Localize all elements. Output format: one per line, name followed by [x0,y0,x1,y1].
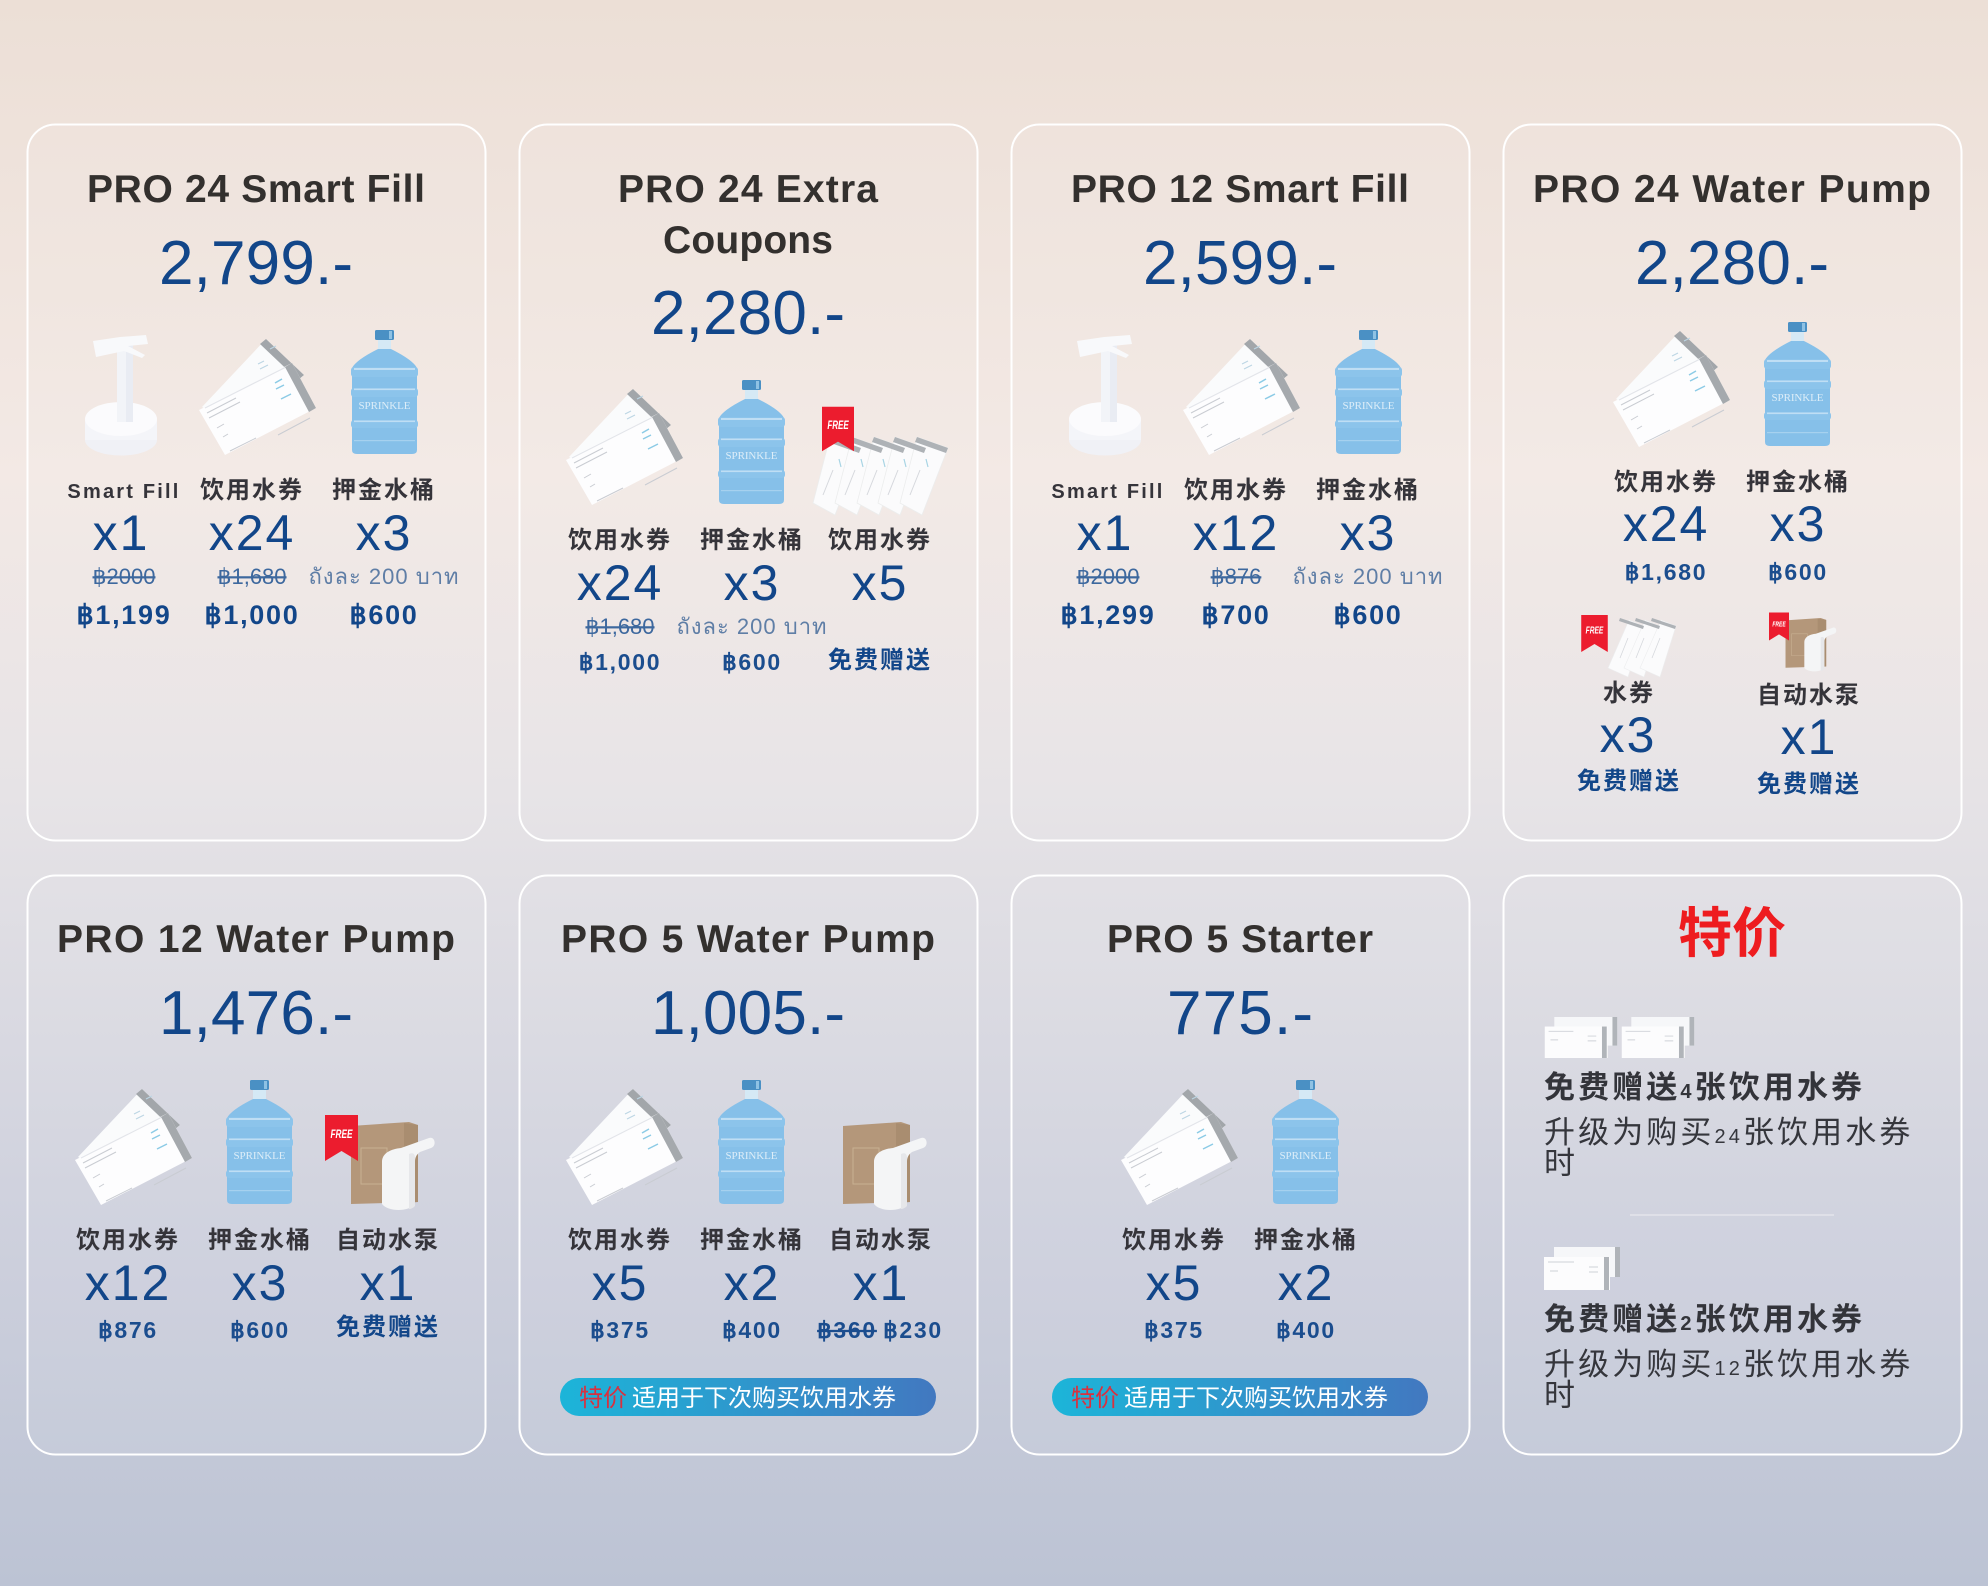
item: free pump: 免费赠送 [1757,771,1861,798]
price: 2,280.- [1635,229,1829,298]
item: coupons [1184,477,1288,630]
item: deposit bottle: x3 [1340,505,1396,561]
item: deposit bottle: ฿400 [1276,1317,1336,1343]
item: deposit bottle: x3 [356,505,412,561]
item: free coupons [828,527,932,674]
heading line 2: Coupons [663,219,833,262]
item: deposit bottle: ฿600 [722,649,782,675]
item: smart fill: ฿2000 [93,564,155,589]
panel: PRO 24 Extra Coupons [520,124,978,840]
icon: bottle [718,1080,785,1204]
item: deposit bottle: x2 [724,1255,780,1311]
item: coupons: x12 [1193,505,1279,561]
offer text: 4 free coupons: 免费赠送4张饮用水券 [1544,1070,1865,1105]
item: coupons: ฿375 [590,1317,650,1343]
item: deposit bottle [208,1226,312,1343]
item: deposit bottle: ถังละ 200 บาท [308,564,460,589]
item: smart fill [1051,481,1165,630]
icon: coupon [1121,1089,1238,1205]
heading: PRO 12 Smart Fill [1071,168,1409,211]
price: 1,005.- [651,979,845,1048]
callout pill [1052,1378,1428,1416]
icon: pump box [1786,618,1836,671]
panel: PRO 5 Starter [1012,876,1470,1454]
item: deposit bottle [1292,476,1444,630]
offer text: 2 free coupons: 升级为购买12张饮用水券 [1544,1347,1913,1382]
item: free pump: x1 [1781,709,1837,765]
panel: PRO 12 Smart Fill [1012,124,1470,840]
icon: free coupons [1608,618,1676,677]
item: deposit bottle: ฿600 [230,1317,290,1343]
item: coupons: x24 [1623,496,1709,552]
icon: bottle [1764,322,1831,446]
callout pill: 适用于下次购买饮用水券 [632,1385,896,1412]
item: coupons: x24 [577,555,663,611]
item: coupons: x5 [592,1255,648,1311]
price: 2,799.- [159,229,353,298]
panel: PRO 24 Water Pump [1504,124,1962,840]
item: coupons: 饮用水券 [76,1227,180,1254]
item: deposit bottle: 押金水桶 [1746,468,1850,496]
item: pump: x1 [853,1255,909,1311]
item: smart fill: ฿1,199 [77,600,171,630]
icon: flat coupons [1545,1017,1617,1058]
price: 775.- [1167,979,1313,1048]
item: free coupons: 免费赠送 [1577,768,1681,795]
icon: coupon [566,1089,683,1205]
item: coupons: 饮用水券 [568,1227,672,1254]
callout pill: 特价 [1071,1385,1119,1412]
item: deposit bottle: 押金水桶 [700,526,804,554]
item: deposit bottle [308,476,460,630]
item: smart fill [67,481,181,630]
item: coupons: 饮用水券 [1184,477,1288,504]
icon: free ribbon [822,407,854,451]
icon: coupon [75,1089,192,1205]
icon: pump box [351,1122,435,1210]
panel: PRO 5 Water Pump [520,876,978,1454]
callout pill: 适用于下次购买饮用水券 [1124,1385,1388,1412]
item: deposit bottle: ฿600 [1768,559,1828,585]
item: deposit bottle: x3 [1770,496,1826,552]
item: coupons: x24 [209,505,295,561]
item: deposit bottle: 押金水桶 [700,1226,804,1254]
item: free coupons: 免费赠送 [828,647,932,674]
item: free pump: 自动水泵 [336,1227,440,1254]
item: coupons: 饮用水券 [1122,1227,1226,1254]
item: deposit bottle: 押金水桶 [332,476,436,504]
item: deposit bottle: ถังละ 200 บาท [676,614,828,639]
icon: coupon [1613,331,1730,447]
item: deposit bottle: ฿400 [722,1317,782,1343]
item: coupons: ฿1,680 [1625,559,1707,585]
offer text: 2 free coupons: 时 [1544,1378,1578,1413]
item: free pump: 免费赠送 [336,1314,440,1341]
panel: special offer [1504,876,1962,1454]
heading: special price: 特价 [1678,904,1786,964]
icon: flat coupons [1622,1017,1694,1058]
item: pump: ฿360 [817,1317,877,1343]
icon: smart fill [85,335,157,456]
item: coupons [568,527,672,675]
item: deposit bottle: x3 [232,1255,288,1311]
icon: coupon [1183,339,1300,455]
item: deposit bottle: ฿600 [1333,600,1403,630]
item: coupons: 饮用水券 [1614,469,1718,496]
item: deposit bottle: x2 [1278,1255,1334,1311]
item: pump: ฿230 [883,1317,943,1343]
item: smart fill: Smart Fill [1051,481,1165,503]
icon: bottle [1272,1080,1339,1204]
item: coupons [568,1227,672,1343]
callout pill [560,1378,936,1416]
item: free coupons: x3 [1600,707,1656,763]
item: free coupons [1577,680,1681,795]
icon: free ribbon [325,1115,358,1161]
item: smart fill: ฿2000 [1077,564,1139,589]
icon: bottle [226,1080,293,1204]
item: deposit bottle: x3 [724,555,780,611]
icon: free ribbon [1581,615,1608,652]
item: smart fill: x1 [1077,505,1133,561]
panel: PRO 12 Water Pump [28,876,486,1454]
heading: PRO 24 Water Pump [1533,168,1931,211]
icon: smart fill [1069,335,1141,456]
callout pill: 特价 [579,1385,627,1412]
offer text: 4 free coupons: 升级为购买24张饮用水券 [1544,1115,1913,1150]
item: smart fill: x1 [93,505,149,561]
icon: bottle [351,330,418,454]
item: coupons: ฿1,680 [217,564,287,589]
offer text: 4 free coupons: 时 [1544,1146,1578,1181]
item: free coupons: 水券 [1603,680,1655,707]
item: coupons: ฿876 [1211,564,1261,589]
icon: coupon [199,339,316,455]
item: free pump [1757,682,1861,798]
item: coupons: 饮用水券 [200,477,304,504]
heading: PRO 5 Water Pump [561,918,935,961]
icon: free coupons [813,437,948,515]
icon: pump box [843,1122,927,1210]
item: coupons: ฿1,680 [585,614,655,639]
item: coupons [200,477,304,630]
item: coupons [76,1227,180,1343]
item: deposit bottle [676,526,828,675]
item: deposit bottle: 押金水桶 [1254,1226,1358,1254]
panel: PRO 24 Smart Fill [28,124,486,840]
offer text: 4 free coupons [1544,1070,1913,1181]
icon: bottle [718,380,785,504]
item: smart fill: ฿1,299 [1061,600,1155,630]
item: deposit bottle [700,1226,804,1343]
price: 2,280.- [651,279,845,348]
item: coupons [1122,1227,1226,1343]
item: coupons: x5 [1146,1255,1202,1311]
item: deposit bottle: ฿600 [349,600,419,630]
price: 2,599.- [1143,229,1337,298]
item: free coupons: 饮用水券 [828,527,932,554]
item: coupons: ฿876 [98,1317,158,1343]
item: free pump: 自动水泵 [1757,682,1861,709]
item: coupons: ฿700 [1201,600,1271,630]
price: 1,476.- [159,979,353,1048]
icon: free ribbon [1769,613,1789,640]
item: coupons: ฿375 [1144,1317,1204,1343]
heading: PRO 12 Water Pump [57,918,455,961]
heading: PRO 24 Smart Fill [87,168,425,211]
item: deposit bottle: 押金水桶 [1316,476,1420,504]
item: coupons: 饮用水券 [568,527,672,554]
item: free pump [336,1227,440,1341]
heading: PRO 24 Extra [618,168,878,211]
item: coupons: x12 [85,1255,171,1311]
offer text: 2 free coupons: 免费赠送2张饮用水券 [1544,1302,1865,1337]
item: deposit bottle [1254,1226,1358,1343]
offer text: 2 free coupons [1544,1302,1913,1413]
item: smart fill: Smart Fill [67,481,181,503]
item: deposit bottle [1746,468,1850,585]
item: coupons: ฿1,000 [579,649,661,675]
item: deposit bottle: ถังละ 200 บาท [1292,564,1444,589]
item: coupons: ฿1,000 [205,600,299,630]
item: pump: 自动水泵 [829,1227,933,1254]
item: free coupons: x5 [852,555,908,611]
icon: coupon [566,389,683,505]
icon: flat coupons [1544,1247,1620,1290]
item: free pump: x1 [360,1255,416,1311]
icon: bottle [1335,330,1402,454]
item: coupons [1614,469,1718,585]
item: deposit bottle: 押金水桶 [208,1226,312,1254]
heading: PRO 5 Starter [1107,918,1373,961]
item: pump [817,1227,943,1343]
